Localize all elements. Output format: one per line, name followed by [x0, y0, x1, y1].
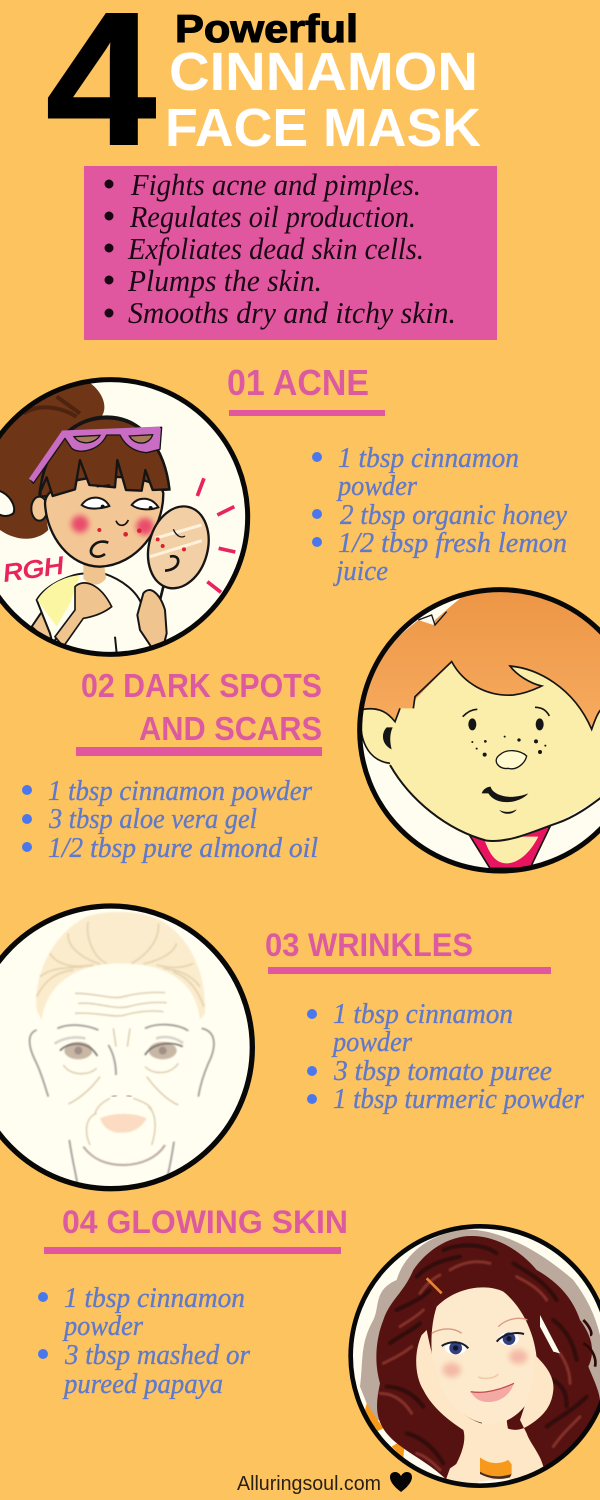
- ingredients: 04 glowing skin: pureed papaya: [62, 1368, 223, 1400]
- heading: 02 dark spots and scars: AND SCARS: [139, 710, 322, 747]
- ingredients: 03 wrinkles: 1 tbsp cinnamon: [333, 998, 513, 1030]
- title word: Cinnamon: CINNAMON: [169, 42, 478, 102]
- benefits text: Exfoliates dead skin cells.: [127, 231, 424, 266]
- heading: 03 wrinkles: [265, 927, 551, 974]
- illustration: boy with freckles: [359, 587, 600, 871]
- heading: 01 acne: 01 ACNE: [227, 362, 369, 403]
- ingredients: 03 wrinkles: [307, 998, 585, 1115]
- benefit bullets: [104, 180, 114, 318]
- ingredients: 01 acne: 1 tbsp cinnamon: [338, 442, 519, 474]
- heading: 04 glowing skin: 04 GLOWING SKIN: [62, 1204, 348, 1240]
- ingredients: 04 glowing skin: powder: [62, 1310, 144, 1342]
- ingredients: 02 dark spots: [22, 775, 318, 864]
- benefits text: Fights acne and pimples.: [130, 167, 421, 202]
- ingredients: 02 dark spots: 3 tbsp aloe vera gel: [48, 803, 257, 835]
- title words: Face Mask: FACE MASK: [165, 98, 481, 158]
- icon: heart: [390, 1472, 412, 1492]
- benefits text: Plumps the skin.: [127, 263, 322, 298]
- footer website credit: Alluringsoul.com: [237, 1473, 381, 1495]
- heading: 03 wrinkles: 03 WRINKLES: [265, 927, 473, 963]
- ingredients: 02 dark spots: 1/2 tbsp pure almond oil: [48, 832, 318, 864]
- ingredients: 01 acne: powder: [336, 470, 418, 502]
- benefits text: Smooths dry and itchy skin.: [128, 295, 456, 330]
- illustration: girl with acne and mirror: [0, 380, 248, 660]
- panel: benefits: [84, 166, 497, 340]
- illustration: woman with wrinkles: [0, 906, 252, 1189]
- ingredients: 03 wrinkles: 3 tbsp tomato puree: [333, 1055, 552, 1087]
- ingredients: 02 dark spots: 1 tbsp cinnamon powder: [48, 775, 313, 807]
- ingredients: 01 acne: 2 tbsp organic honey: [340, 499, 567, 531]
- title word: Powerful: Powerful: [175, 8, 358, 51]
- ingredients: 03 wrinkles: 1 tbsp turmeric powder: [333, 1083, 585, 1115]
- ingredients: 04 glowing skin: 1 tbsp cinnamon: [64, 1282, 245, 1314]
- ingredients: 01 acne: [312, 442, 567, 587]
- ingredients: 03 wrinkles: powder: [331, 1026, 413, 1058]
- benefits text: Regulates oil production.: [129, 199, 416, 234]
- illustration: woman with glowing skin: [351, 1226, 600, 1490]
- title: [46, 0, 481, 185]
- ingredients: 01 acne: 1/2 tbsp fresh lemon: [338, 527, 567, 559]
- heading: 02 dark spots and scars: [76, 667, 322, 756]
- illustration: girl with acne and mirror: RGH: [2, 552, 66, 587]
- heading: 02 dark spots and scars: 02 DARK SPOTS: [81, 667, 322, 704]
- ingredients: 01 acne: juice: [332, 555, 388, 587]
- ingredients: 04 glowing skin: [38, 1282, 251, 1400]
- ingredients: 04 glowing skin: 3 tbsp mashed or: [64, 1339, 251, 1371]
- heading: 04 glowing skin: [44, 1204, 348, 1254]
- benefits text: [127, 167, 456, 330]
